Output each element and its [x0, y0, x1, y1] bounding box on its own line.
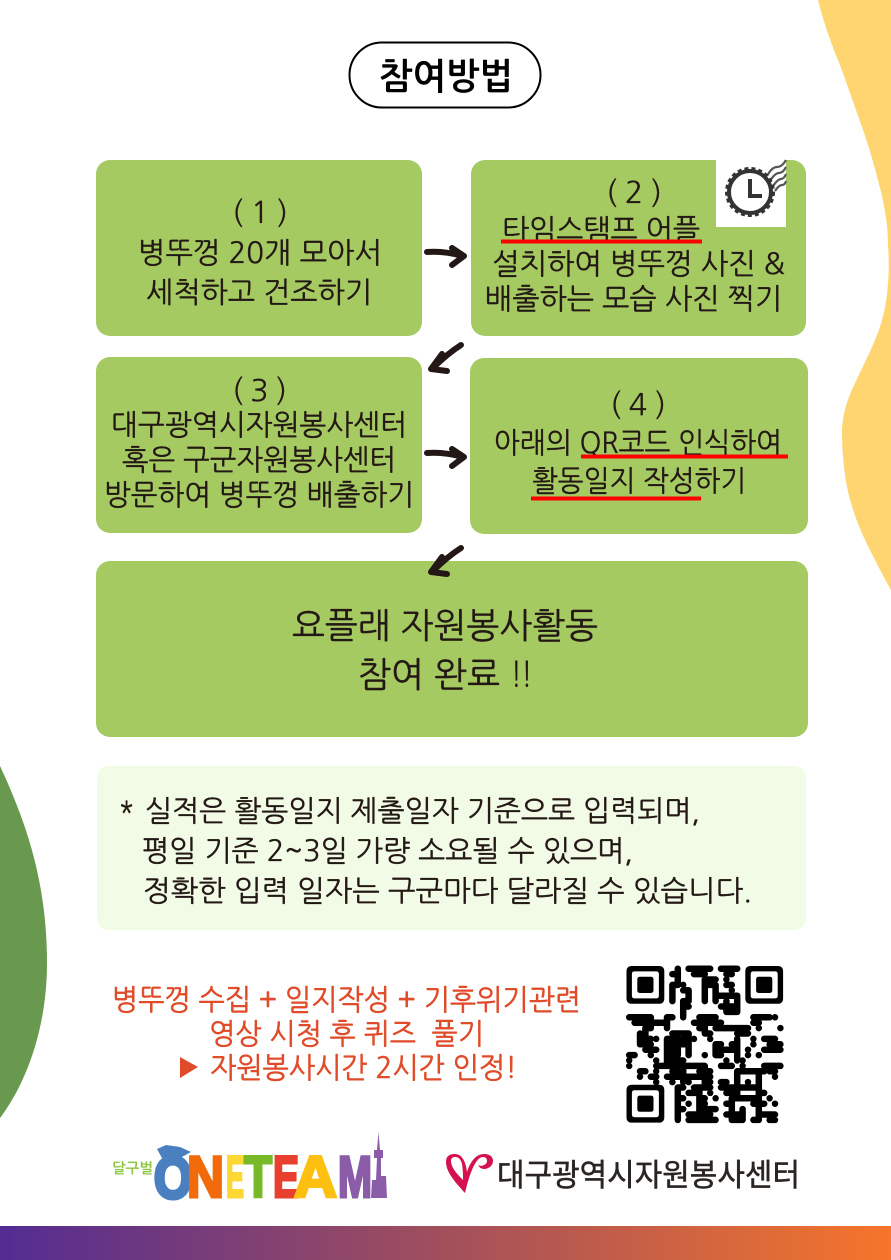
panel: step 2: ( 2 ): [606, 177, 662, 208]
panel: note: [97, 766, 806, 930]
logo: Dalgubeol One Team: [112, 1132, 387, 1211]
logo: Daegu volunteer center: 대구광역시자원봉사센터: [497, 1150, 800, 1195]
logo: Dalgubeol One Team: N: [187, 1145, 224, 1210]
panel: step 3: 혹은 구군자원봉사센터: [122, 446, 396, 475]
callout: volunteer hours: 자원봉사시간 2시간 인정!: [210, 1053, 517, 1083]
panel: step 4: 활동일지 작성하기: [532, 467, 746, 496]
decorative blob: left green: [0, 766, 47, 1118]
panel: step 3: ( 3 ): [232, 375, 287, 406]
callout: volunteer hours: [112, 986, 581, 1083]
panel: note: 정확한 입력 일자는 구군마다 달라질 수 있습니다.: [143, 876, 752, 906]
arrow: step 3 to 4: [427, 449, 464, 466]
icon: triangle: [180, 1057, 198, 1078]
logo: Dalgubeol One Team: E: [273, 1145, 299, 1210]
logo: Dalgubeol One Team: 달구벌: [112, 1161, 153, 1176]
panel: step 3: 방문하여 병뚜껑 배출하기: [104, 480, 414, 510]
arrow: step 1 to 2: [427, 248, 464, 265]
logo: Dalgubeol One Team: T: [244, 1145, 272, 1210]
panel: step 1: [96, 160, 422, 336]
panel: step 5 result: 참여 완료: [358, 658, 500, 693]
panel: step 2: 설치하여 병뚜껑 사진 &: [492, 250, 785, 279]
panel: note: 평일 기준 2~3일 가량 소요될 수 있으며,: [142, 837, 633, 866]
panel: step 5 result: !!: [511, 658, 532, 693]
panel: step 2: 배출하는 모습 사진 찍기: [485, 284, 782, 314]
red underline: [501, 240, 702, 244]
panel: step 1: ( 1 ): [232, 197, 288, 228]
panel: step 4: 아래의 QR코드 인식하여: [494, 429, 782, 458]
panel: step 2: 타임스탬프 어플: [502, 216, 700, 245]
panel: note: 실적은 활동일지 제출일자 기준으로 입력되며,: [145, 796, 700, 826]
icon: timestamp clock: [716, 160, 786, 227]
panel: step 1: 세척하고 건조하기: [146, 278, 372, 308]
panel: step 5 result: 요플래 자원봉사활동: [292, 609, 598, 644]
logo: Dalgubeol One Team: A: [294, 1145, 337, 1210]
callout: volunteer hours: 영상 시청 후 퀴즈 풀기: [209, 1019, 484, 1049]
bottom gradient bar: [0, 1226, 891, 1260]
icon: heart: [446, 1154, 493, 1193]
logo: Dalgubeol One Team: O: [154, 1146, 192, 1211]
callout: volunteer hours: 병뚜껑 수집 + 일지작성 + 기후위기관련: [112, 986, 581, 1015]
panel: step 4: [470, 358, 808, 534]
title pill: [350, 42, 540, 108]
logo: Dalgubeol One Team: M: [338, 1145, 372, 1210]
panel: step 1: 병뚜껑 20개 모아서: [138, 239, 382, 268]
panel: note: *: [118, 791, 135, 825]
QR code: [626, 966, 783, 1123]
red underlines: [531, 456, 788, 498]
title pill: 참여방법: [379, 58, 513, 95]
arrow: step 4 to 5: [431, 548, 461, 574]
logo: Dalgubeol One Team: E: [226, 1145, 244, 1210]
panel: step 2: [471, 160, 806, 336]
panel: step 4: ( 4 ): [610, 389, 666, 420]
panel: step 3: [96, 357, 422, 533]
arrow: step 2 to 3: [431, 345, 461, 371]
decorative blob: top right yellow: [818, 0, 891, 590]
panel: step 3: 대구광역시자원봉사센터: [111, 411, 407, 440]
panel: step 5 result: [96, 561, 808, 737]
